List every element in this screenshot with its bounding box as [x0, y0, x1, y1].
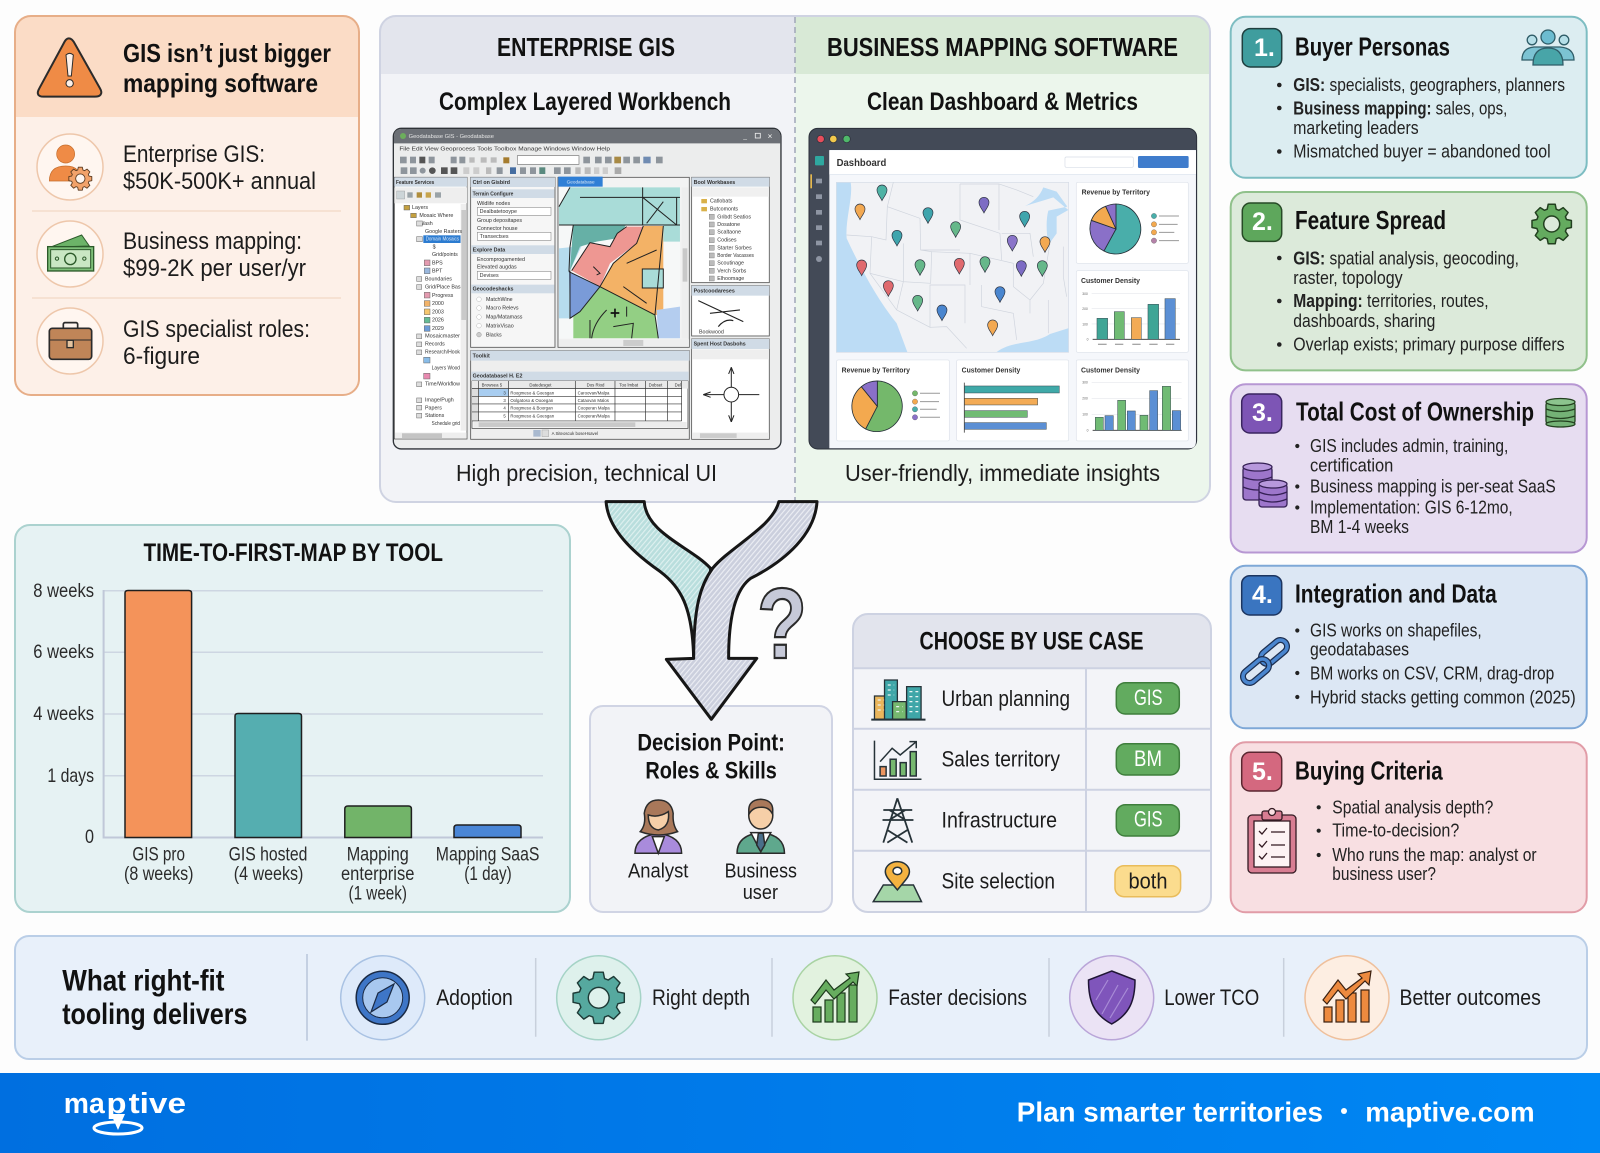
title 5: Buying Criteria	[1295, 756, 1443, 786]
card 1: buyer personas	[1231, 17, 1587, 178]
icon: gear	[1532, 204, 1571, 244]
bullets 4: geodatabases	[1310, 639, 1409, 660]
layers tree panel: Stations	[425, 413, 445, 419]
catalog tree panel: Elhoomage	[717, 276, 744, 282]
bar: GIS pro	[125, 590, 192, 838]
subheading: clean dashboard: Clean Dashboard & Metrics	[867, 88, 1138, 116]
band heading: tooling delivers	[62, 998, 247, 1031]
attribute table panel: Roogmeso & Boorgan	[510, 406, 553, 411]
card: revenue pie lower: Revenue by Territory	[842, 367, 910, 374]
row: urban planning: Urban planning	[942, 686, 1070, 711]
badge 4: 4.	[1252, 581, 1273, 609]
caption: GIS UI: High precision, technical UI	[456, 460, 717, 486]
row: enterprise GIS cost	[37, 134, 316, 200]
catalog tree panel: Spent Host Dasbohs	[694, 342, 746, 348]
catalog tree panel: Starter Sorbes	[717, 245, 752, 251]
catalog tree panel: Catlobats	[710, 199, 733, 205]
icon: people	[1522, 30, 1574, 65]
bullets 5	[1317, 796, 1537, 884]
layers tree panel: Wash	[419, 221, 433, 227]
x axis labels: enterprise	[341, 864, 414, 885]
screenshot: GIS workbench window: Geodatabase GIS - Geodatabase	[409, 134, 494, 140]
attribute table panel: Roogmeso & Goesgan	[510, 414, 555, 419]
attribute table panel: Caroovan/Malpa	[578, 390, 610, 395]
badge 5: 5.	[1252, 758, 1273, 786]
geoprocessing options panel: Group depositapes	[477, 218, 522, 224]
catalog tree panel: Dosatone	[717, 222, 740, 228]
attribute table panel: Browsea 5	[482, 383, 503, 388]
card: customer density bars: 300	[1082, 292, 1088, 296]
layers tree panel: Research/Hook	[425, 350, 460, 356]
screenshot: GIS workbench window: _	[742, 134, 747, 141]
layers tree panel: BPT	[432, 268, 443, 274]
heading: panel title	[123, 38, 331, 98]
attribute table panel: Cooperan/Malpa	[578, 414, 610, 419]
layers tree panel: Papers	[425, 405, 442, 411]
layers tree panel: Layers Wood	[432, 365, 460, 371]
item: adoption: Adoption	[436, 985, 513, 1010]
y axis labels: 1 days	[47, 765, 94, 787]
screenshot: GIS workbench window	[393, 128, 781, 449]
item: lower TCO	[1070, 956, 1259, 1040]
geoprocessing options panel: Wildlife nodes	[477, 201, 510, 207]
row: site selection	[873, 862, 1181, 902]
title 4: Integration and Data	[1295, 579, 1497, 609]
attribute table panel: Datedesget	[529, 383, 552, 388]
label: business user: Business	[725, 861, 797, 883]
layers tree panel: Mosaicmaster	[425, 334, 460, 340]
window controls	[817, 135, 850, 143]
layers tree panel: Image/Pugh	[425, 398, 454, 404]
x axis labels: GIS hosted	[229, 845, 307, 866]
bullets 5: Spatial analysis depth?	[1332, 796, 1493, 817]
x axis labels: (4 weeks)	[234, 864, 303, 885]
bar: mapping SaaS	[454, 825, 521, 838]
heading: business mapping software: BUSINESS MAPPING SOFTWARE	[827, 32, 1178, 62]
badge 4	[1242, 576, 1282, 615]
catalog tree panel: Bookwood	[699, 329, 724, 335]
y axis labels: 4 weeks	[33, 703, 94, 725]
logo: maptive	[64, 1088, 186, 1134]
band heading	[62, 965, 247, 1031]
screenshot: GIS workbench window: File Edit View Geoprocess Tools Toolbox Manage Windows Window Help	[399, 147, 610, 153]
tagline: Plan smarter territories	[1017, 1097, 1323, 1128]
badge 3: 3.	[1252, 399, 1273, 427]
icon: database	[1546, 398, 1575, 427]
row: business mapping cost: Business mapping:	[123, 228, 302, 255]
tagline: maptive.com	[1365, 1097, 1535, 1128]
bullets 4	[1295, 620, 1576, 707]
row: business mapping cost: $99-2K per user/yr	[123, 255, 306, 282]
card: customer density bars: 0	[1087, 338, 1089, 342]
row: infrastructure	[883, 798, 1179, 843]
badge 1	[1242, 29, 1282, 67]
row: specialist salaries: 6-figure	[123, 343, 200, 370]
geoprocessing options panel: Elevated augdas	[477, 265, 517, 271]
tagline	[1017, 1097, 1535, 1128]
row: sales territory: BM	[1134, 746, 1162, 771]
card: customer density bars: 100	[1082, 322, 1088, 326]
item: right depth: Right depth	[652, 985, 750, 1010]
catalog tree panel: Postcoodareses	[694, 289, 735, 295]
geoprocessing options panel: MatrixVisao	[486, 323, 514, 329]
catalog tree panel: Verch Sorbs	[717, 268, 747, 274]
label: business user: user	[743, 882, 778, 904]
attribute table panel: Too lmbat	[619, 383, 639, 388]
badge 5	[1242, 752, 1282, 791]
bullets 3: GIS includes admin, training,	[1310, 435, 1508, 456]
x axis labels: GIS pro	[132, 845, 185, 866]
bullets 2: Mapping: territories, routes,	[1293, 290, 1489, 311]
item: better outcomes	[1305, 956, 1541, 1040]
icon: chain link	[1240, 637, 1290, 686]
screenshot: business dashboard window: Dashboard	[837, 158, 886, 169]
icon: warning triangle	[38, 38, 101, 97]
panel: time-to-first-map bar chart	[15, 525, 570, 912]
bar: mapping enterprise	[345, 806, 411, 838]
x axis labels: Mapping	[347, 845, 409, 866]
y axis labels	[33, 580, 94, 848]
bullets 3: certification	[1310, 454, 1393, 475]
bullets 2	[1277, 247, 1565, 354]
card 2: feature spread	[1231, 192, 1587, 370]
attribute table panel: Geodatabasel H. E2	[473, 374, 522, 380]
card: customer density grouped bars: 300	[1082, 381, 1088, 385]
attribute table panel: 5	[503, 414, 506, 419]
attribute table panel: 3	[503, 390, 506, 395]
icon: clipboard checklist	[1248, 808, 1296, 873]
bullets 2: raster, topology	[1293, 267, 1403, 288]
row: infrastructure: GIS	[1134, 807, 1162, 832]
x axis labels: (1 week)	[348, 883, 407, 904]
panel: decision point roles and skills	[590, 706, 832, 912]
panel: GIS cost warning	[15, 16, 359, 395]
icon: coin stacks	[1243, 463, 1287, 507]
card 4: integration and data	[1231, 566, 1587, 728]
card: customer density bars: Customer Density	[1081, 278, 1140, 285]
card 5: buying criteria	[1231, 742, 1587, 912]
badge 2: 2.	[1252, 208, 1273, 236]
geoprocessing options panel: Map/Matamass	[486, 315, 523, 321]
panel: choose by use case table	[853, 614, 1211, 912]
card: customer density grouped bars: Customer Density	[1081, 367, 1140, 374]
geoprocessing options panel: Connector house	[477, 226, 518, 232]
row: sales territory: Sales territory	[942, 747, 1060, 772]
layers tree panel: Boundaries	[425, 276, 452, 282]
y axis labels: 6 weeks	[33, 641, 94, 663]
geoprocessing options panel: Terrain Configure	[473, 192, 513, 198]
catalog tree panel: Scoutinage	[717, 261, 744, 267]
attribute table panel: Del	[675, 383, 681, 388]
catalog tree panel: Border Vacasses	[717, 253, 754, 259]
layers tree panel: 2000	[432, 301, 444, 307]
attribute table panel: Dobset	[649, 383, 663, 388]
layers tree panel: 2029	[432, 326, 444, 332]
x axis labels: (8 weeks)	[124, 864, 194, 885]
bullets 1	[1277, 74, 1565, 162]
item: right depth	[557, 956, 750, 1040]
layers tree panel: Domain Mosaics	[426, 237, 459, 243]
layers tree panel: Google Rasters	[425, 229, 462, 235]
title 1: Buyer Personas	[1295, 31, 1450, 61]
geoprocessing options panel: Geocodeshacks	[473, 287, 514, 293]
caption: mapping UI: User-friendly, immediate insights	[845, 460, 1160, 486]
card: customer density grouped bars: 0	[1087, 429, 1089, 433]
bullets 2: dashboards, sharing	[1293, 310, 1435, 331]
heading: decision point	[637, 730, 785, 784]
title 2: Feature Spread	[1295, 205, 1446, 235]
geoprocessing options panel: Transectses	[480, 234, 509, 240]
chart title: TIME-TO-FIRST-MAP BY TOOL	[144, 539, 443, 567]
heading: decision point: Roles & Skills	[645, 757, 777, 784]
layers tree panel: 2026	[432, 318, 444, 324]
bullets 3: Business mapping is per-seat SaaS	[1310, 476, 1556, 496]
attribute table panel: Cataovan Malos	[578, 398, 609, 403]
bullets 5: business user?	[1332, 863, 1436, 884]
card: customer density horizontal bars	[957, 360, 1069, 441]
layers tree panel	[394, 177, 467, 439]
attribute table panel: Oolgatoso & Oooegan	[510, 398, 554, 403]
geoprocessing options panel: MatchWine	[486, 297, 513, 303]
screenshot: business dashboard window	[809, 128, 1197, 449]
badge 3	[1242, 394, 1282, 433]
screenshot: GIS workbench window: ✕	[767, 133, 773, 140]
row: urban planning: GIS	[1134, 685, 1162, 710]
x axis labels	[124, 845, 539, 904]
card: customer density horizontal bars: Customer Density	[962, 367, 1020, 374]
card: customer density grouped bars	[1076, 360, 1188, 441]
heading: enterprise GIS: ENTERPRISE GIS	[497, 32, 675, 62]
geoprocessing options panel: Explore Data	[473, 247, 505, 253]
arrow: two paths merging into decision point	[606, 502, 817, 719]
row: business mapping cost	[37, 221, 306, 287]
geoprocessing options panel: Encomprogamented	[477, 257, 525, 263]
row: site selection: Site selection	[942, 868, 1055, 893]
attribute table panel: Dos Riod	[587, 383, 605, 388]
heading: panel title: GIS isn’t just bigger	[123, 38, 331, 68]
icon: analyst	[635, 800, 682, 853]
row: specialist salaries: GIS specialist roles:	[123, 316, 310, 343]
footer bar	[0, 1073, 1600, 1153]
logo: maptive: tive	[129, 1088, 186, 1120]
item: better outcomes: Better outcomes	[1400, 985, 1541, 1010]
card 3: total cost of ownership	[1231, 384, 1587, 552]
layers tree panel: 2003	[432, 309, 444, 315]
geoprocessing options panel: Dealbatetooype	[480, 209, 517, 215]
card: customer density bars	[1076, 271, 1188, 352]
bullets 5: Time-to-decision?	[1332, 820, 1459, 841]
heading: decision point: Decision Point:	[637, 730, 785, 757]
card: revenue pie: Revenue by Territory	[1082, 189, 1150, 196]
geoprocessing options panel: Ctrl on Gisbird	[473, 180, 510, 186]
item: faster decisions: Faster decisions	[888, 985, 1027, 1010]
item: faster decisions	[793, 956, 1027, 1040]
row: specialist salaries	[37, 308, 310, 374]
catalog tree panel: Butcomonts	[710, 207, 738, 213]
card: customer density grouped bars: 200	[1082, 397, 1088, 401]
attribute table panel: Roogmeso & Goesgan	[510, 390, 555, 395]
catalog tree panel: Gribdt Seatios	[717, 214, 751, 220]
geoprocessing options panel: Blacks	[486, 332, 502, 338]
attribute table panel: 3	[503, 398, 506, 403]
geoprocessing options panel	[471, 177, 555, 347]
logo: maptive: ma	[64, 1088, 106, 1120]
heading: panel title: mapping software	[123, 68, 318, 98]
bullets 4: BM works on CSV, CRM, drag-drop	[1310, 662, 1554, 683]
layers tree panel: Records	[425, 342, 445, 348]
panel: what right-fit tooling delivers	[15, 936, 1587, 1059]
attribute table panel	[471, 351, 689, 439]
geoprocessing options panel: Macro Relevs	[486, 306, 519, 312]
bullets 3: Implementation: GIS 6-12mo,	[1310, 497, 1513, 518]
bullets 1: marketing leaders	[1293, 117, 1419, 138]
row: urban planning	[871, 680, 1179, 720]
icon: question mark: ?	[757, 568, 807, 680]
row: enterprise GIS cost: $50K-500K+ annual	[123, 168, 316, 195]
row: site selection: both	[1128, 868, 1168, 893]
layers tree panel: Mosaic Where	[419, 213, 453, 219]
layers tree panel: BPS	[432, 260, 443, 266]
attribute table panel: A Siteoscuk boseHsavel	[552, 431, 598, 436]
catalog tree panel: Scaltaone	[717, 230, 741, 236]
x axis labels: Mapping SaaS	[436, 845, 539, 866]
bullets 4: GIS works on shapefiles,	[1310, 620, 1482, 641]
bullets 1: Business mapping: sales, ops,	[1293, 97, 1507, 118]
bar: GIS hosted	[235, 714, 302, 838]
item: adoption	[341, 956, 513, 1040]
badge 1: 1.	[1254, 34, 1275, 62]
table heading: CHOOSE BY USE CASE	[920, 627, 1144, 655]
layers tree panel: Layers	[412, 205, 428, 211]
bullets 3	[1295, 435, 1556, 537]
bullets 5: Who runs the map: analyst or	[1332, 844, 1537, 865]
subheading: complex workbench: Complex Layered Workbench	[439, 88, 731, 116]
layers tree panel: Grid/Place Bas	[425, 284, 461, 290]
dashboard sidebar	[810, 156, 824, 262]
geoprocessing options panel: Devises	[480, 273, 499, 279]
y axis labels: 0	[85, 826, 94, 848]
y axis labels: 8 weeks	[33, 580, 94, 602]
badge 2	[1242, 203, 1282, 241]
card: revenue pie	[1076, 182, 1188, 263]
layers tree panel: Schedule grid	[432, 421, 460, 427]
US map with pins	[836, 182, 1069, 352]
icon: business user	[737, 799, 784, 853]
attribute table panel: Cooperan Malpa	[578, 406, 610, 411]
layers tree panel: Feature Services	[396, 180, 434, 186]
x axis labels: (1 day)	[464, 864, 512, 885]
map view with coloured territories	[558, 177, 689, 347]
layers tree panel: Grid/points	[432, 252, 458, 258]
row: infrastructure: Infrastructure	[942, 807, 1057, 832]
logo: maptive: p	[106, 1088, 126, 1120]
band heading: What right-fit	[62, 965, 225, 998]
attribute table panel: 4	[503, 406, 506, 411]
panel: enterprise GIS versus business mapping comparison	[380, 16, 1210, 502]
row: enterprise GIS cost: Enterprise GIS:	[123, 141, 265, 168]
layers tree panel: Time/Workflow	[425, 382, 460, 388]
map view with coloured territories: Geodatabase	[567, 179, 595, 184]
catalog tree panel: Bool Workbases	[694, 180, 735, 186]
row: sales territory	[874, 741, 1179, 779]
item: lower TCO: Lower TCO	[1164, 985, 1259, 1010]
label: business user	[725, 861, 797, 904]
card: customer density grouped bars: 100	[1082, 413, 1088, 417]
label: analyst: Analyst	[628, 861, 689, 883]
card: revenue pie lower	[837, 360, 949, 441]
card: customer density bars: 200	[1082, 307, 1088, 311]
catalog tree panel	[692, 177, 769, 439]
bullets 2: GIS: spatial analysis, geocoding,	[1293, 247, 1519, 268]
layers tree panel: $	[433, 245, 436, 251]
attribute table panel: Toolkit	[473, 353, 490, 359]
bullets 1: Mismatched buyer = abandoned tool	[1293, 140, 1551, 162]
bullets 3: BM 1-4 weeks	[1310, 516, 1409, 537]
title 3: Total Cost of Ownership	[1296, 397, 1534, 427]
catalog tree panel: Codises	[717, 238, 737, 244]
layers tree panel: Progress	[432, 293, 454, 299]
